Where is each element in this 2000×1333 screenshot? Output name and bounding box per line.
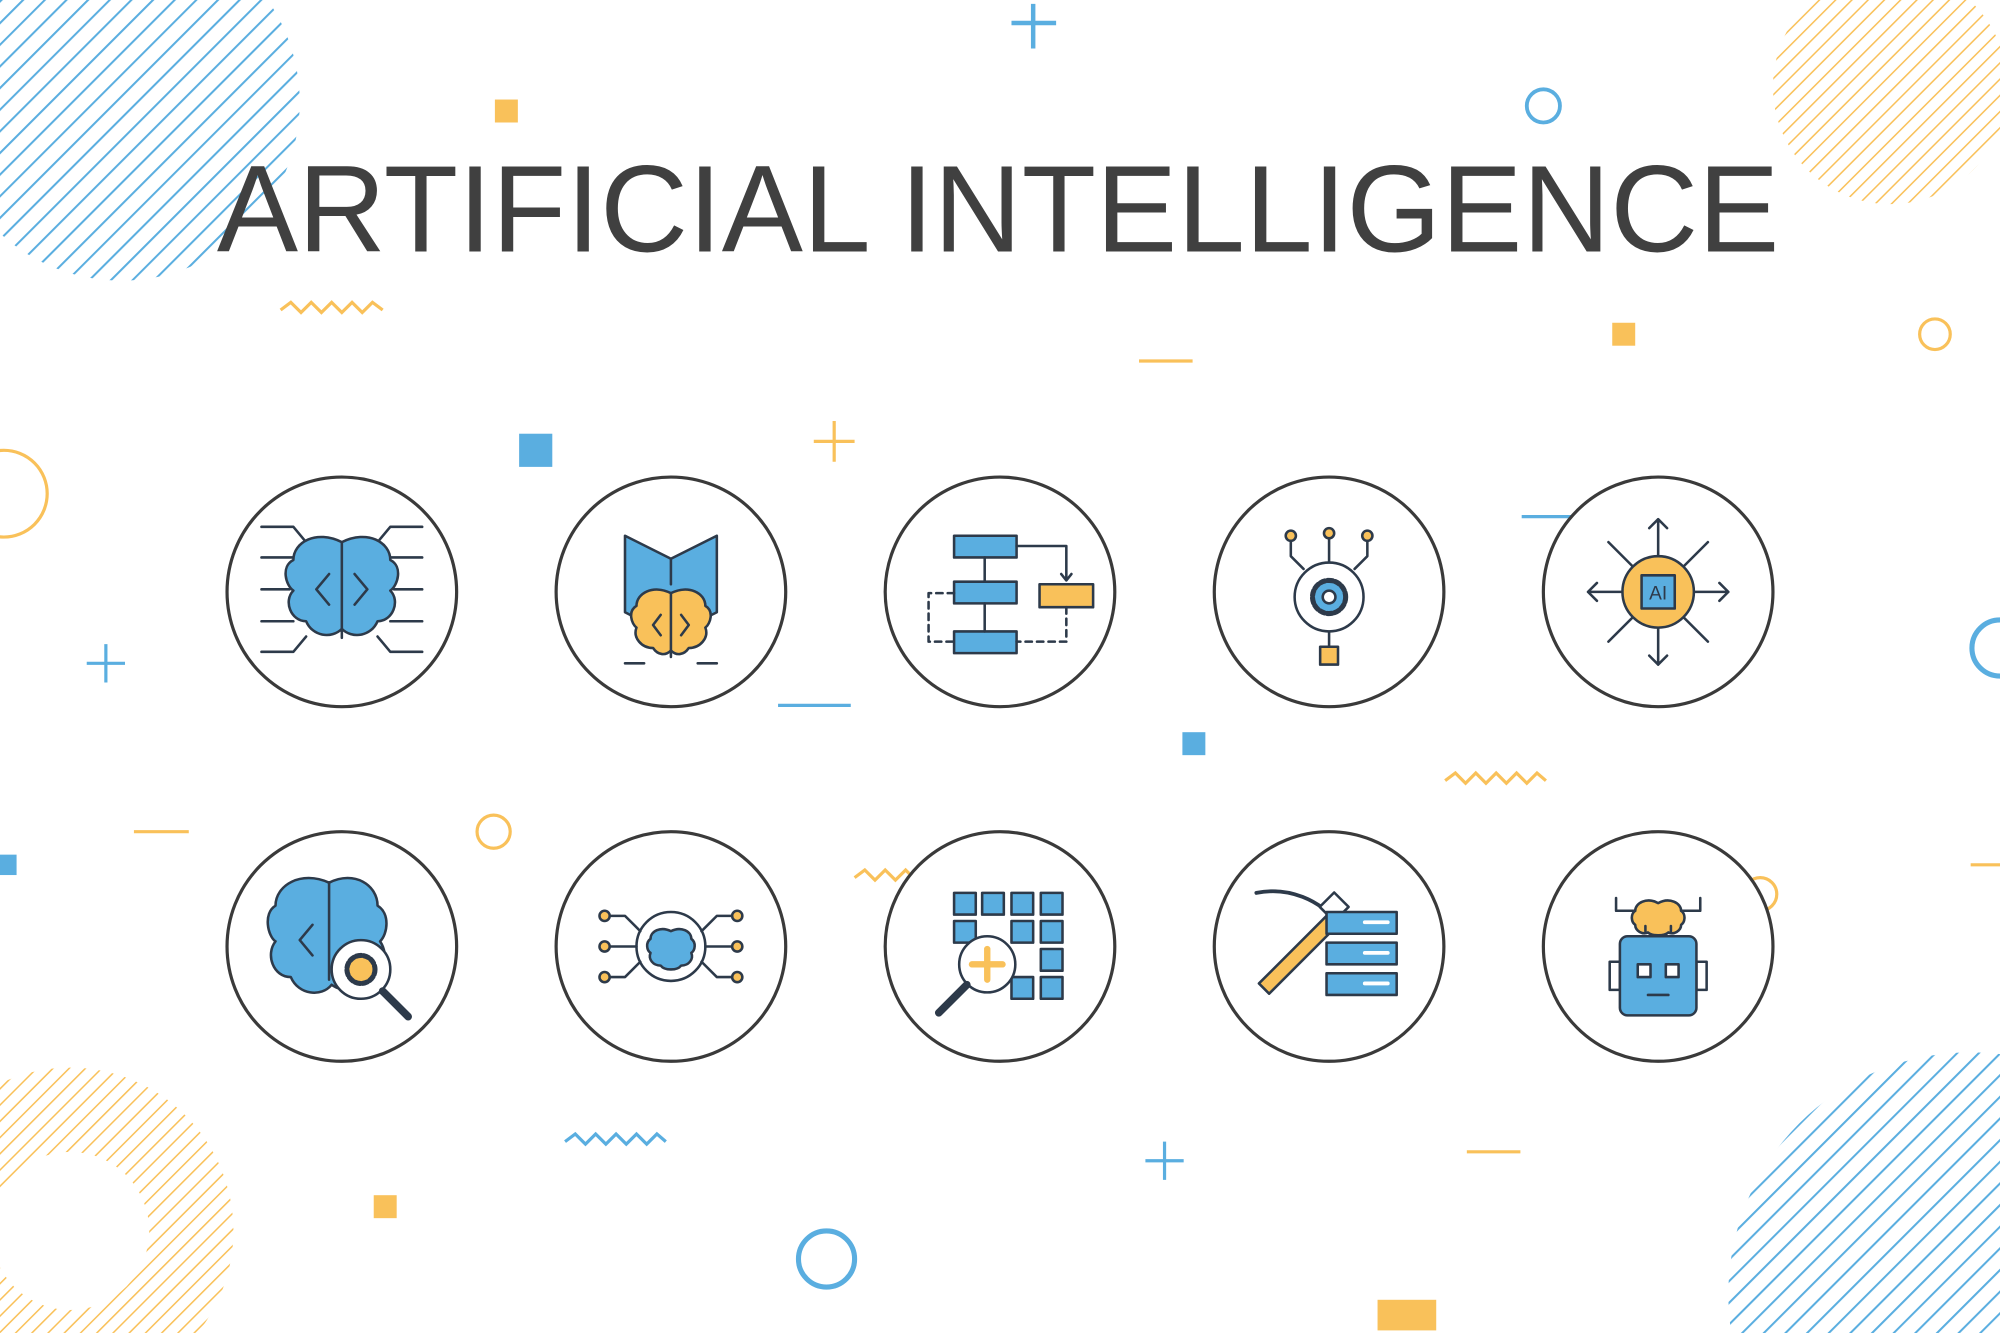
- icon: brain with magnifier: [268, 878, 408, 1017]
- icon: robot: [1610, 898, 1707, 1015]
- title: ARTIFICIAL INTELLIGENCE: [217, 140, 1779, 278]
- icon: gear process: [1286, 528, 1372, 665]
- icon: flowchart: [929, 536, 1093, 653]
- icon: pickaxe servers: [1256, 891, 1397, 995]
- decoration: bottom-right blue stripes: [1728, 1052, 2000, 1333]
- icon: AI chip: AI: [1649, 584, 1667, 605]
- decoration: top-right orange stripes: [1773, 0, 2000, 204]
- icon: AI chip: [1588, 519, 1728, 665]
- icon circles: [227, 477, 1773, 1061]
- decoration: bottom-left orange ring: [0, 1068, 234, 1333]
- icon: brain network: [599, 911, 742, 982]
- decoration: top-left blue stripes: [0, 0, 300, 281]
- icon: neural brain: [261, 527, 422, 652]
- icon: book brain: [625, 536, 717, 663]
- icon: data grid search: [939, 893, 1062, 1013]
